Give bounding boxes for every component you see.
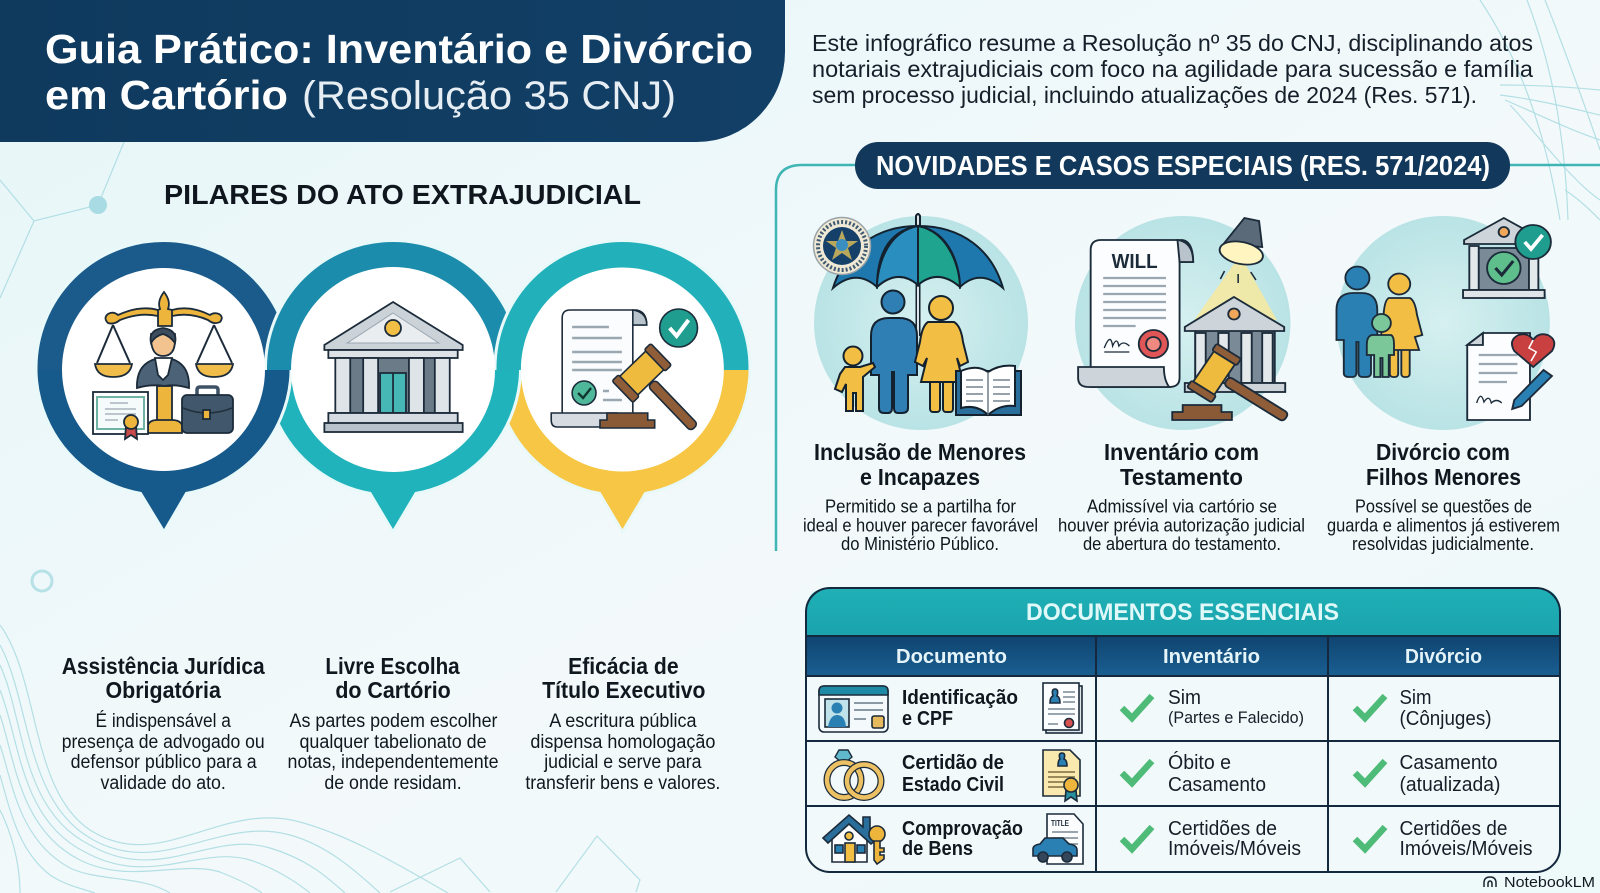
row 1: identificação: Identificação: [902, 687, 1018, 709]
pillar rings: [36, 240, 750, 532]
column 2 text: de abertura do testamento.: [1083, 534, 1281, 554]
pillar 2 text: Livre Escolha: [325, 653, 460, 679]
column 1 text: do Ministério Público.: [841, 534, 999, 554]
column 2 text: houver prévia autorização judicial: [1058, 516, 1305, 536]
pillar 3 text: judicial e serve para: [543, 751, 702, 773]
intro text: Este infográfico resume a Resolução nº 35 do CNJ, disciplinando atos: [812, 30, 1533, 56]
pillar 3 icon: deed and gavel: [521, 268, 724, 472]
column 1 text: Inclusão de Menores: [814, 439, 1026, 465]
column 1 text: Permitido se a partilha for: [825, 496, 1016, 516]
icon: document with seal: [1043, 683, 1082, 733]
pillar 3 text: [525, 653, 720, 794]
row 2: certidão: Casamento: [1168, 774, 1266, 796]
column 3 text: guarda e alimentos já estiverem: [1327, 516, 1560, 536]
title: [45, 26, 753, 118]
pillar 3 text: Título Executivo: [542, 677, 705, 703]
pillar 1 text: É indispensável a: [96, 709, 231, 732]
icon: title and car: [1033, 814, 1083, 864]
table title: DOCUMENTOS ESSENCIAIS: [1026, 599, 1339, 626]
title: em Cartório: [45, 72, 288, 118]
icon: title and car: TITLE: [1051, 819, 1070, 828]
pillar 1 text: defensor público para a: [71, 751, 257, 773]
column 3 text: resolvidas judicialmente.: [1352, 534, 1534, 554]
pillar 1 text: [62, 653, 265, 794]
row 1: identificação: Sim: [1168, 687, 1201, 709]
pillar 2 text: de onde residam.: [324, 772, 462, 794]
table column headers: Divórcio: [1405, 645, 1482, 668]
table column headers: [896, 645, 1482, 668]
row 3: comprovação: Certidões de: [1400, 818, 1508, 840]
heading pill: novidades: NOVIDADES E CASOS ESPECIAIS (RES. 571/2024): [876, 150, 1490, 181]
row 1: identificação: (Cônjuges): [1400, 708, 1492, 730]
column 2 text: Admissível via cartório se: [1087, 496, 1277, 516]
row 3: comprovação: Imóveis/Móveis: [1400, 838, 1532, 860]
column 2 text: Inventário com: [1104, 439, 1259, 465]
row 2: certidão: (atualizada): [1400, 774, 1500, 796]
pillar 1 text: validade do ato.: [100, 772, 226, 794]
row 3: comprovação: de Bens: [902, 838, 973, 860]
column 2 text: Testamento: [1120, 464, 1243, 490]
pillar 1 icon: scales, lawyer, certificate, briefcase: [62, 268, 265, 471]
icon: id card: [819, 686, 888, 732]
row 2: certidão: Óbito e: [1168, 751, 1231, 774]
icon: will, spotlight, courthouse: [1075, 216, 1301, 439]
icon: family, courthouse approval, signed divorce document: [1336, 216, 1554, 430]
row 3: comprovação: Imóveis/Móveis: [1168, 838, 1301, 860]
row 1: identificação: Sim: [1400, 687, 1432, 709]
table column headers: Inventário: [1163, 645, 1260, 668]
column 3 text: [1327, 439, 1560, 554]
pillar 3 text: dispensa homologação: [530, 731, 715, 753]
pillar 3 text: transferir bens e valores.: [525, 772, 720, 794]
intro text: notariais extrajudiciais com foco na agilidade para sucessão e família: [812, 56, 1533, 82]
column 3 text: Filhos Menores: [1366, 464, 1521, 490]
pillar 1 text: presença de advogado ou: [62, 731, 265, 753]
heading: pilares: PILARES DO ATO EXTRAJUDICIAL: [164, 179, 641, 210]
column 1 text: [803, 439, 1038, 554]
row 3: comprovação: [902, 818, 1532, 860]
pillar 2 text: [288, 653, 498, 794]
column 3 text: Divórcio com: [1376, 439, 1510, 465]
icon: wedding rings: [827, 750, 881, 798]
row 3: comprovação: Certidões de: [1168, 818, 1277, 840]
heading pill: novidades: [855, 142, 1510, 189]
pillar 3 text: A escritura pública: [549, 710, 697, 732]
row 2: certidão: Casamento: [1400, 752, 1498, 774]
pillar 2 text: As partes podem escolher: [290, 710, 498, 732]
row 2: certidão: Estado Civil: [902, 774, 1004, 796]
pillar 2 text: notas, independentemente: [288, 751, 498, 773]
check marks: [1122, 696, 1385, 849]
table column headers: Documento: [896, 645, 1007, 668]
row 2: certidão: Certidão de: [902, 752, 1004, 774]
pillar 2 text: do Cartório: [335, 677, 451, 703]
pillar 3 text: Eficácia de: [568, 653, 679, 679]
icon: will, spotlight, courthouse: WILL: [1112, 250, 1158, 273]
intro text: [812, 30, 1533, 108]
intro text: sem processo judicial, incluindo atualizações de 2024 (Res. 571).: [812, 82, 1477, 108]
icon: family under umbrella: [814, 214, 1028, 430]
table: documentos essenciais: [806, 588, 1560, 872]
row 1: identificação: (Partes e Falecido): [1168, 709, 1304, 727]
column 2 text: [1058, 439, 1305, 554]
title: (Resolução 35 CNJ): [302, 74, 676, 118]
row 2: certidão: [902, 751, 1500, 796]
column 3 text: Possível se questões de: [1355, 496, 1532, 516]
pillar 2 icon: courthouse: [291, 267, 495, 472]
row 1: identificação: [902, 687, 1492, 730]
pillar 1 text: Obrigatória: [105, 677, 221, 703]
row 1: identificação: e CPF: [902, 708, 953, 730]
pillar 2 text: qualquer tabelionato de: [299, 731, 487, 753]
column 1 text: ideal e houver parecer favorável: [803, 516, 1038, 536]
icon: house and key: [823, 815, 885, 864]
title: Guia Prático: Inventário e Divórcio: [45, 26, 753, 72]
header banner: [0, 0, 785, 142]
row 3: comprovação: Comprovação: [902, 818, 1023, 840]
notebooklm watermark: NotebookLM: [1504, 874, 1595, 891]
icon: certificate: [1043, 750, 1080, 801]
column 1 text: e Incapazes: [860, 464, 980, 490]
pillar 1 text: Assistência Jurídica: [62, 653, 265, 679]
